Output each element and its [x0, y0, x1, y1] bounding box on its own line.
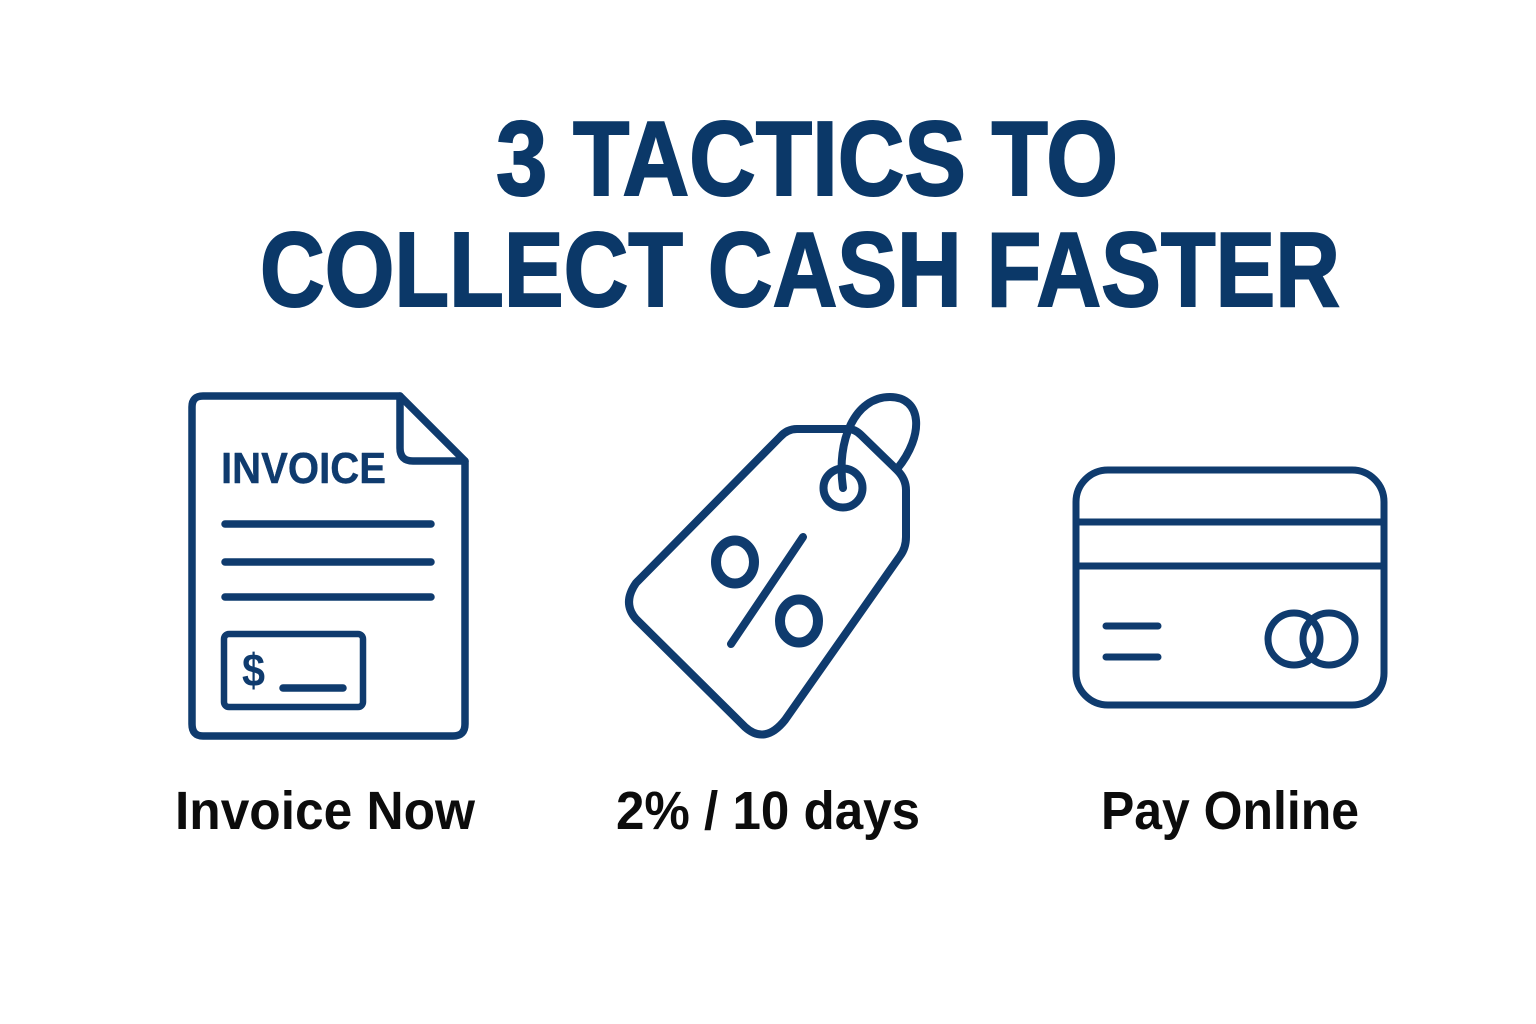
invoice label: INVOICE — [221, 444, 386, 493]
title — [260, 100, 1340, 329]
icon: price tag — [629, 397, 916, 735]
icon: credit card — [1076, 470, 1384, 705]
label: pay online: Pay Online — [1101, 781, 1359, 841]
dollar sign: $ — [242, 644, 265, 696]
icon: invoice — [192, 396, 465, 736]
title: 3 TACTICS TO — [496, 100, 1118, 218]
percent glyph circles — [716, 540, 754, 584]
label: discount: 2% / 10 days — [616, 781, 920, 841]
label: invoice now: Invoice Now — [175, 781, 476, 841]
title: COLLECT CASH FASTER — [260, 211, 1340, 329]
